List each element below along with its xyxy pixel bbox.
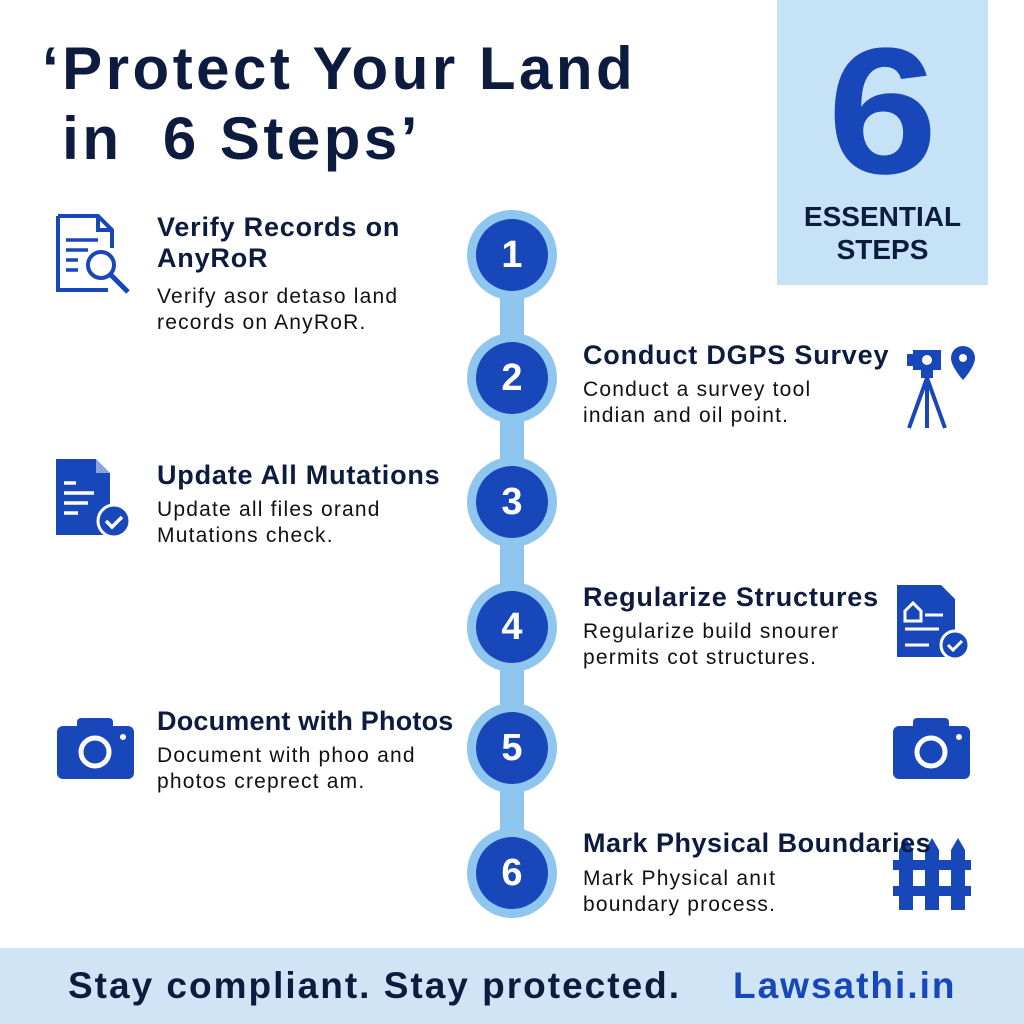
step circles: 3	[501, 481, 523, 523]
step 1 text: records on AnyRoR.	[157, 311, 367, 334]
step 3 text	[157, 460, 440, 547]
icon: document search	[56, 214, 130, 294]
step 5 text: Document with Photos	[157, 706, 454, 736]
badge: 6 essential steps: STEPS	[837, 234, 928, 265]
step 4 text: Regularize build snourer	[583, 620, 839, 643]
icon: camera right	[893, 718, 970, 779]
step circles: 6	[501, 852, 523, 894]
badge: 6 essential steps: 6	[827, 11, 938, 212]
step 2 text	[583, 340, 889, 427]
icon: permit document	[897, 585, 968, 658]
step 1 text: Verify asor detaso land	[157, 285, 398, 308]
icon: survey tripod	[907, 346, 975, 429]
title: in 6 Steps’	[62, 105, 421, 172]
step 3 text: Mutations check.	[157, 524, 334, 547]
step 3 text: Update All Mutations	[157, 460, 440, 490]
title	[42, 35, 636, 172]
step 5 text: photos creprect am.	[157, 770, 365, 793]
step 2 text: indian and oil point.	[583, 404, 789, 427]
step 4 text: Regularize Structures	[583, 582, 879, 612]
step 2 text: Conduct a survey tool	[583, 378, 811, 401]
step 6 text: Mark Physical anıt	[583, 867, 776, 890]
step 2 text: Conduct DGPS Survey	[583, 340, 889, 370]
step 1 text: Verify Records on	[157, 212, 400, 242]
step 1 text: AnyRoR	[157, 243, 268, 273]
footer	[0, 948, 1024, 1024]
badge: 6 essential steps: ESSENTIAL	[804, 201, 961, 232]
step 5 text: Document with phoo and	[157, 744, 416, 767]
badge: 6 essential steps	[777, 0, 988, 285]
step 3 text: Update all files orand	[157, 498, 381, 521]
icon: camera left	[57, 718, 134, 779]
icon: fence	[893, 838, 971, 910]
step circles: 2	[501, 357, 523, 399]
step 6 text: boundary process.	[583, 893, 776, 916]
step circles: 4	[501, 606, 523, 648]
step circles: 5	[501, 727, 523, 769]
step 4 text	[583, 582, 879, 669]
step 6 text	[583, 828, 931, 916]
step 6 text: Mark Physical Boundaries	[583, 828, 931, 858]
step 1 text	[157, 212, 400, 334]
step circles: 1	[501, 234, 523, 276]
step 4 text: permits cot structures.	[583, 646, 817, 669]
step 5 text	[157, 706, 454, 793]
icon: document check	[56, 459, 128, 536]
footer: Lawsathi.in	[733, 965, 956, 1006]
title: ‘Protect Your Land	[42, 35, 636, 102]
footer: Stay compliant. Stay protected.	[68, 965, 681, 1006]
timeline bar	[500, 255, 524, 873]
